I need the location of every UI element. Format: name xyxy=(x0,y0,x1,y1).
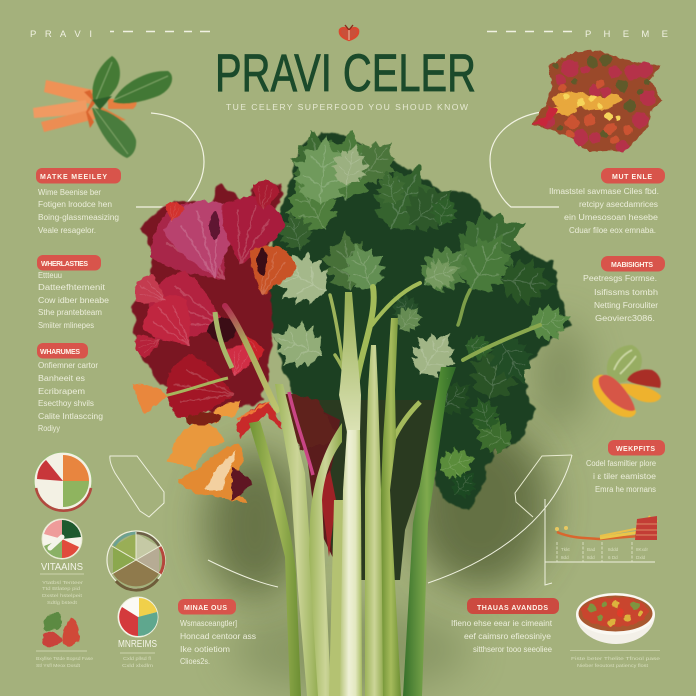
icon: top logo xyxy=(340,25,358,40)
minerals label: Cxld pllsd fl xyxy=(123,656,151,661)
illustration: flower and vegetable pile xyxy=(532,50,662,152)
chart: ribbon timeline: Tkkt xyxy=(561,547,570,552)
soft shadows behind plant xyxy=(205,320,588,695)
stalk: second xyxy=(275,384,320,696)
subtitle: TUE CELERY SUPERFOOD YOU SHOUD KNOW xyxy=(226,102,469,112)
panel: minae text xyxy=(178,599,256,666)
body text: Wsmasceangtler] xyxy=(180,619,237,628)
body text xyxy=(451,619,553,654)
body text: Cduar filoe eox emnaba. xyxy=(569,226,656,235)
body text: Cow idber bneabe xyxy=(38,296,110,305)
body text: Isifissms tombh xyxy=(594,288,658,297)
minerals label: Cxld xlxdlm xyxy=(122,663,153,668)
chart: ribbon timeline: 8dd xyxy=(561,555,569,560)
panel: benefits text xyxy=(586,440,665,494)
chart: ribbon timeline: 8Kxdr xyxy=(636,547,648,552)
body text xyxy=(586,459,657,494)
dark gaps xyxy=(208,211,267,342)
body text: Onfiemner cartor xyxy=(38,361,98,370)
illustration: red leaf flowers xyxy=(129,178,301,427)
body text: Calite Intlasccing xyxy=(38,412,103,421)
leaf stems xyxy=(330,283,540,400)
body text: Clioes2s. xyxy=(180,657,210,666)
body text: Geovierc3086. xyxy=(595,314,655,323)
red stem xyxy=(225,306,277,410)
label pill: MINAE OUS xyxy=(184,605,227,612)
body text: Boing-glassmeasizing xyxy=(38,213,119,222)
small orange petal xyxy=(133,384,168,414)
panel: left upper text xyxy=(36,168,121,235)
label pill: MABISIGHTS xyxy=(611,262,653,269)
body text: Codel fasmiltier plore xyxy=(586,459,657,468)
green stem xyxy=(215,312,232,368)
panel: left lower text xyxy=(37,343,103,433)
body text: Fotigen lroodce hen xyxy=(38,200,112,209)
label pill: WHARUMES xyxy=(40,349,80,356)
bowl caption: Fiste beter Thelite Tfnool pase xyxy=(571,656,661,661)
illustration: celery leaves xyxy=(259,124,575,510)
body text xyxy=(180,619,256,666)
connector: lower right polygon outline xyxy=(515,455,572,517)
petals xyxy=(129,178,301,427)
dark backing behind stalks xyxy=(280,392,440,580)
connector: lower left sweep curve xyxy=(208,560,278,587)
panel: left middle text xyxy=(37,255,110,330)
stalk: white centre xyxy=(340,430,362,696)
body text: Veale resagelor. xyxy=(38,226,96,235)
stalk: far left xyxy=(249,421,301,696)
vitamins label: Ytatbsl Tenteer xyxy=(42,580,84,585)
illustration: celery stalks xyxy=(249,292,476,696)
body text xyxy=(38,361,103,433)
panel: right upper text xyxy=(549,168,665,235)
connector: top left curve xyxy=(136,113,204,207)
leaf over stalk top xyxy=(429,333,476,383)
body text xyxy=(38,188,119,235)
stalk: white centre top xyxy=(339,292,361,432)
minerals label: MNREIMS xyxy=(118,638,157,650)
minerals label xyxy=(118,638,157,668)
body text: Ettteuu xyxy=(38,271,62,280)
body text: Peetresgs Formse. xyxy=(583,274,657,283)
bowl caption: Nieber feoutost patiency flost xyxy=(577,663,649,668)
title: PRAVI CELER xyxy=(215,44,476,103)
illustration: beans and peppers xyxy=(593,345,661,417)
label pill: MATKE MEEILEY xyxy=(40,174,107,181)
body text: Ilmaststel savmase Ciles fbd. xyxy=(549,187,659,196)
chart: ribbon timeline xyxy=(545,499,657,585)
label pill: WHERLASTIES xyxy=(41,261,88,268)
panel: right middle text xyxy=(583,256,665,323)
red mass xyxy=(132,183,283,415)
body text xyxy=(38,271,110,330)
chart: ribbon timeline: Bad xyxy=(587,547,596,552)
label pill: WEKPFITS xyxy=(616,446,655,453)
side stem xyxy=(164,378,228,396)
stalk: pink edge xyxy=(289,392,313,475)
body text: Esecthoy shvils xyxy=(38,399,94,408)
body text: eef caimsro efieosiniye xyxy=(464,632,552,641)
stalk: pale filler xyxy=(329,500,343,696)
body text: sitthseror tooo seeoliee xyxy=(473,645,553,654)
stalk: mid green xyxy=(381,318,401,696)
icon caption: Bxyllse Tstde Bopsd Fase xyxy=(36,656,93,661)
header right label: P H E M E xyxy=(585,29,668,40)
illustration: salad bowl xyxy=(576,593,655,644)
stalk: dark green right xyxy=(403,367,456,696)
icon caption: Stl Ysfl Meox Dxsdt xyxy=(36,663,81,668)
body text xyxy=(549,187,659,235)
stalk: pale right xyxy=(365,345,384,696)
stalk: curved centre left xyxy=(309,423,342,696)
chart: ribbon timeline: 8ddd xyxy=(608,547,619,552)
label pill: MUT ENLE xyxy=(612,174,652,181)
icon: herbs and red vegetables xyxy=(42,612,80,646)
connector: top right curve xyxy=(490,112,559,207)
pie chart: large xyxy=(34,452,92,511)
illustration: orange flowers xyxy=(168,400,282,502)
stalk: branch right xyxy=(393,402,420,440)
pale leaves xyxy=(259,133,469,388)
body text: i ε tiler eamistoe xyxy=(593,472,657,481)
icon caption xyxy=(36,651,93,668)
body text: Netting Forouliter xyxy=(594,301,658,310)
body text: retcipy asecdamrices xyxy=(579,200,658,209)
chart: ribbon timeline: Dxld xyxy=(636,555,646,560)
body text: Emra he mornans xyxy=(595,485,656,494)
header left label: P R A V I xyxy=(30,29,92,40)
illustration: carrot sticks and leaves xyxy=(33,56,172,158)
connector: lower right sweep curve xyxy=(428,455,572,583)
body text: Honcad centoor ass xyxy=(180,632,256,641)
pie chart: centre multi-slice xyxy=(107,531,165,590)
body text: Ecribrapem xyxy=(38,387,85,396)
pie chart: minerals xyxy=(118,597,158,637)
vitamins label: VITAAINS xyxy=(41,561,83,573)
dark leaf mass xyxy=(262,130,570,510)
vitamins label: Ttd Btlatep pid xyxy=(42,586,81,591)
vitamins label: Dxstel hstelpeit xyxy=(42,593,83,598)
body text: Wime Beenise ber xyxy=(38,188,101,197)
chart: ribbon timeline: 8dd xyxy=(587,555,595,560)
body text: ein Umesosoan hesebe xyxy=(564,213,659,222)
pie chart: vitamins xyxy=(42,519,82,559)
vitamins label: Sdtlg bstedt xyxy=(47,600,78,605)
body text: Banheeit es xyxy=(38,374,85,383)
chart: ribbon timeline: 6 Dd xyxy=(608,555,618,560)
body text: Smiiter mlinepes xyxy=(38,321,94,330)
connector: lower left polygon outline xyxy=(110,456,164,517)
body text: Ike ootietiom xyxy=(180,645,230,654)
mid green leaves xyxy=(272,124,575,503)
body text: Datteefhtemenit xyxy=(38,283,106,292)
body text: Sthe prantebteam xyxy=(38,308,102,317)
vitamins label xyxy=(40,561,84,605)
label pill: THAUAS AVANDDS xyxy=(477,605,548,612)
bowl caption xyxy=(570,650,661,668)
body text: Ifieno ehse eear ie cimeaint xyxy=(451,619,553,628)
body text xyxy=(583,274,658,323)
body text: Rodiyy xyxy=(38,424,60,433)
panel: thalas text xyxy=(451,598,559,654)
